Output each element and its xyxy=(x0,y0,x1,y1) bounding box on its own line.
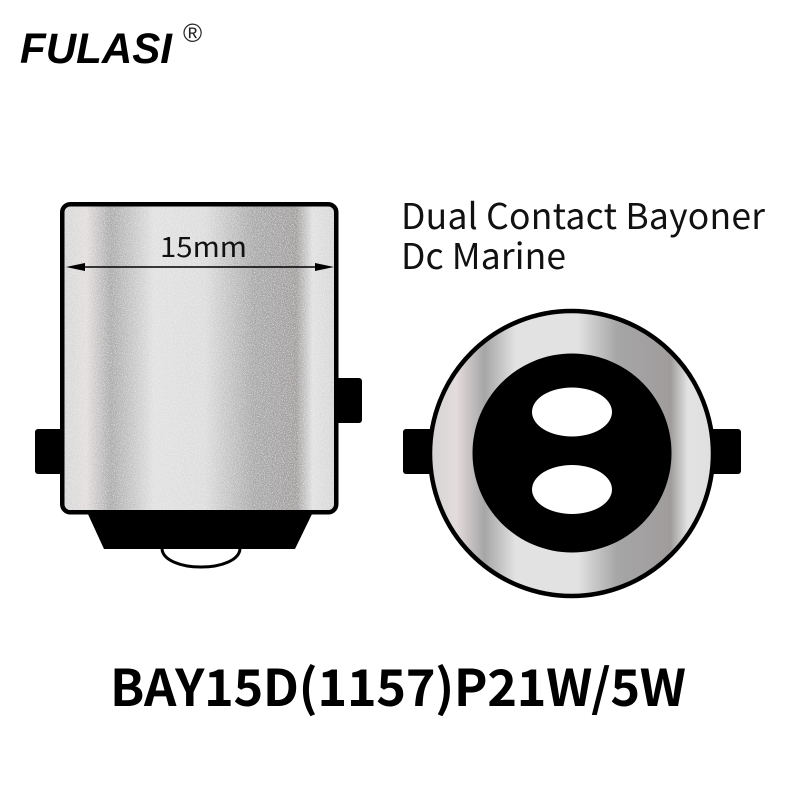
description text: Dc Marine xyxy=(401,229,566,280)
description text xyxy=(401,189,765,280)
metal cylinder fill xyxy=(64,206,335,511)
left pin xyxy=(403,429,437,474)
cylinder outline xyxy=(62,204,336,512)
base trapezoid xyxy=(87,512,313,549)
right pin xyxy=(334,378,362,423)
dimension arrow xyxy=(66,263,334,271)
metal ring xyxy=(430,311,713,596)
bulb end view xyxy=(403,311,741,596)
logo: FULASI: FULASI xyxy=(20,25,173,73)
left pin xyxy=(35,429,65,474)
black insulator xyxy=(472,354,672,552)
lower contact xyxy=(532,465,612,514)
upper contact xyxy=(532,388,612,436)
right pin xyxy=(707,429,741,474)
model title: BAY15D(1157)P21W/5W xyxy=(110,647,686,721)
logo: FULASI: ® xyxy=(183,18,202,48)
bulb side view xyxy=(35,204,362,567)
contact loop xyxy=(162,549,240,567)
dimension label: 15mm xyxy=(160,226,247,266)
description text: Dual Contact Bayoner xyxy=(401,189,765,240)
